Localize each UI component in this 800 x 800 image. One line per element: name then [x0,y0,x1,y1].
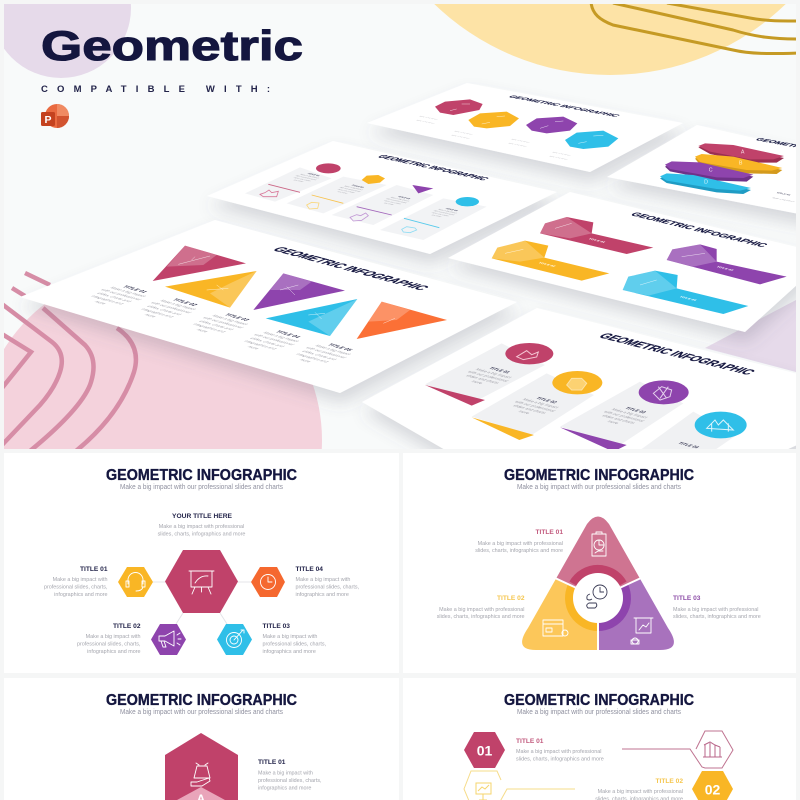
slide heading: GEOMETRIC INFOGRAPHIC [506,95,622,118]
callout: title 04: infographics and more [296,592,349,598]
top text block: YOUR TITLE HERE [172,513,233,520]
callout: title 02: professional slides, charts, [77,642,141,648]
triangle captions: with our professional [252,333,296,346]
card captions: TITLE 04 [444,208,460,212]
triangle captions: slides, charts and [247,337,286,348]
compatible with label: COMPATIBLE WITH: [41,84,270,95]
side captions [772,192,794,202]
slide mockup: stacked layers [607,125,800,220]
hexagon 02 [692,771,733,800]
callout: title 01: TITLE 01 [516,738,544,745]
outlined hexagon with board icon [464,771,575,800]
card captions: slides and charts [336,189,357,194]
card captions: slides and charts [465,374,501,385]
icon: PowerPoint logo [41,104,69,128]
gold curved lines [591,2,798,54]
decorative lilac triangle [705,300,796,372]
callout: title 01 [258,759,322,792]
card captions: with our professional [294,175,318,181]
decorative lilac circle [0,0,131,78]
card captions: with our professional [385,198,408,204]
panel subtitle: Make a big impact with our professional slides and charts [120,484,283,491]
card captions: TITLE 02 [534,397,558,404]
outlined hexagon with bar chart icon [622,731,733,768]
callout: title 01: Make a big impact with [53,577,108,583]
icon: clipboard [592,532,606,556]
card captions: TITLE 02 [350,184,366,188]
hexagon captions: Make a big impact [415,120,436,124]
decorative yellow circle [434,4,786,75]
blue hexagon with target icon [217,624,252,655]
callout: title 01: professional slides, charts, [258,778,322,784]
callout: title 02: infographics and more [87,649,140,655]
top text block: Make a big impact with professional [159,524,244,530]
triangle captions: with our professional [201,316,245,329]
card captions: slides and charts [430,212,451,217]
ribbon shapes [492,217,787,314]
callout: title 01: slides, charts, infographics and more [516,756,604,762]
pink hexagon with hand icon [165,733,238,800]
callout: title 01: infographics and more [258,786,311,792]
callout: title 01: TITLE 01 [258,759,286,766]
icon: PowerPoint logo: P [44,114,52,126]
callout: title 02: Make a big impact with professional [598,789,683,795]
triangle captions: more [245,345,261,350]
panel heading: GEOMETRIC INFOGRAPHIC [106,467,297,484]
callout: title 01: Make a big impact with professional [516,749,601,755]
icon: presentation board [631,618,653,644]
card captions: Make a big impact [474,368,514,379]
callout: title 03 [262,623,327,655]
card captions: and more [383,202,395,206]
card captions: more [517,410,532,415]
callout: title 04: Make a big impact with [296,577,350,583]
cards, badges, dividers and icons [245,163,487,240]
triangle captions: TITLE 04 [273,330,302,339]
triangle captions: Make a big impact [261,331,301,343]
callout: title 03: infographics and more [262,649,316,655]
hexagon captions: Make a big impact [418,116,439,120]
triangle captions: slides, charts and [299,350,338,361]
triangle captions: TITLE 05 [325,343,354,352]
callout: title 02: TITLE 02 [113,623,141,630]
hexagon captions: Make a big impact [551,152,572,156]
ribbon captions: TITLE 02 [537,262,556,267]
panel subtitle: Make a big impact with our professional slides and charts [517,484,681,491]
icon: clock and person [587,585,607,608]
layered bars A B C D [660,143,784,194]
callout: title 04 [296,566,360,598]
card captions: more [470,380,485,385]
callout: title 02: slides, charts, infographics and more [437,614,524,620]
hexagon captions: Make a big impact [548,156,569,160]
slide mockup: hexagon row [367,83,683,172]
layered bars A B C D: D [704,179,708,185]
triangle captions: infographics and [241,340,278,351]
triangle captions [91,285,353,362]
callout: title 02: TITLE 02 [497,595,525,602]
panel heading: GEOMETRIC INFOGRAPHIC [504,467,694,484]
callout: title 02 [595,778,683,800]
top text block: slides, charts, infographics and more [158,532,245,538]
yellow hexagon with headset icon [118,567,153,597]
ribbon captions [537,238,734,302]
card captions: Make a big impact [437,209,458,214]
hexagon captions [415,116,572,160]
card captions: and more [292,179,305,183]
card captions: TITLE 03 [396,196,412,200]
triangle captions: Make a big impact [210,314,250,326]
callout: title 01: infographics and more [54,592,108,598]
triangle captions: infographics and [88,295,125,306]
icon: browser window [543,620,568,636]
callout: title 02: TITLE 02 [656,778,683,785]
triangle captions: slides, charts and [196,320,235,331]
ribbon captions: TITLE 04 [678,296,698,302]
callout: title 01 [516,738,604,762]
callout: title 01: TITLE 01 [536,529,563,536]
card captions [287,173,460,219]
card captions: TITLE 01 [487,367,511,374]
triangle captions: Make a big impact [313,344,353,356]
triangle captions: infographics and [138,308,175,319]
triangle shapes [153,246,447,339]
panel: numbered hexagon infographic [403,678,796,800]
panel heading: GEOMETRIC INFOGRAPHIC [106,692,297,709]
card captions: with our professional [513,400,557,412]
callout: title 03: TITLE 03 [673,595,701,602]
panel: triangle infographic [403,453,796,673]
card captions: and more [430,214,443,218]
triangle captions: TITLE 01 [120,285,149,294]
decorative pink circle [4,304,322,449]
card captions: with our professional [432,210,456,216]
segmented triangle chart [522,516,674,650]
slide mockup: tall cards with circles [362,314,796,449]
slide heading: GEOMETRIC INFOGRAPHIC [595,332,758,377]
slide heading: GEOMETRIC INFOGRAPHIC [269,245,433,292]
card captions: Make a big impact [521,398,561,409]
hexagon 01: 01 [477,742,492,758]
callout: title 02 [77,623,141,655]
central hexagon with presentation icon [165,550,238,613]
card captions: more [606,420,621,425]
hexagon captions: Make a big impact [450,135,471,139]
callout: title 03: TITLE 03 [262,623,290,630]
callout: title 01 [475,529,563,554]
triangle captions: with our professional [99,288,143,301]
triangle captions: slides, charts and [94,292,133,303]
panel subtitle: Make a big impact with our professional slides and charts [120,709,283,716]
side captions: Make a big impact [771,197,796,202]
hexagon captions: Make a big impact [507,143,528,147]
hexagon captions: Make a big impact [453,131,474,135]
triangle captions: TITLE 02 [170,298,199,307]
panel heading: GEOMETRIC INFOGRAPHIC [504,692,694,709]
triangle captions: TITLE 03 [222,313,251,322]
callout: title 03: professional slides, charts, [262,642,327,648]
callout: title 02: Make a big impact with [86,634,141,640]
ribbon captions: TITLE 03 [715,266,734,271]
card captions: TITLE 04 [676,442,700,449]
layered bars A B C D: B [739,160,743,166]
hexagon captions: Make a big impact [510,139,531,143]
triangle captions: more [297,358,313,363]
ribbon captions: TITLE 01 [587,238,606,243]
triangle captions: with our professional [149,301,193,314]
panel: hero showcase [4,4,796,449]
card captions: slides and charts [383,200,403,205]
card captions: with our professional [338,187,362,192]
card captions: Make a big impact [299,174,320,179]
main title: Geometric [41,22,303,69]
triangle captions: more [92,300,108,305]
card captions: slides and charts [292,177,313,182]
card captions: TITLE 03 [623,407,647,414]
slide mockup: ribbon tags [448,192,800,332]
panel: stacked hexagon infographic [4,678,399,800]
triangle captions: infographics and [293,353,330,364]
callout: title 03: Make a big impact with professional [673,607,758,613]
triangle captions: Make a big impact [108,286,148,298]
card captions: slides and charts [601,414,637,425]
hexagon 02: 02 [705,782,720,798]
card captions: Make a big impact [343,185,364,191]
side captions: TITLE 01 [775,192,792,196]
callout: title 01: TITLE 01 [80,566,108,573]
top text block [158,513,245,538]
callout: title 02 [437,595,525,620]
card captions: with our professional [602,410,646,422]
hexagon shapes [435,99,618,149]
orange hexagon with clock icon [251,567,285,597]
card captions: and more [336,191,349,194]
pink chevron lines [2,273,136,451]
card captions: with our professional [466,370,510,382]
purple hexagon with megaphone icon [151,624,186,655]
callout: title 04: TITLE 04 [296,566,323,573]
triangle captions: with our professional [304,346,348,359]
cards and circles [425,343,747,449]
layered bars A B C D: C [709,168,713,174]
callout: title 01: slides, charts, infographics and more [475,548,563,554]
callout: title 03: Make a big impact with [262,634,317,640]
hexagon 01 [464,732,505,768]
slide heading: GEOMETRIC INFOGRAPHIC [628,211,769,249]
panel subtitle: Make a big impact with our professional slides and charts [517,709,681,716]
triangle captions: slides, charts and [144,305,183,316]
card captions: Make a big impact [610,408,650,419]
callout: title 01 [44,566,108,598]
card captions: slides and charts [512,404,548,415]
layered bars A B C D: A [741,149,745,155]
slide mockup: triangles [20,220,517,393]
slide heading: GEOMETRIC INFOGRAPHIC [375,154,492,181]
triangle captions: more [194,328,210,333]
slide mockup: cards with badges [207,141,557,254]
panel: hexagon hub infographic [4,453,399,673]
card captions: TITLE 01 [306,173,322,177]
callout: title 01: Make a big impact with [258,770,313,776]
triangle captions: infographics and [190,323,227,334]
callout: title 04: professional slides, charts, [296,584,360,590]
callout: title 03 [673,595,761,620]
connectors [153,582,251,624]
triangle captions: Make a big impact [158,299,198,311]
card captions [456,367,700,449]
triangle captions: more [142,313,158,318]
callout: title 03: slides, charts, infographics and more [673,614,761,620]
callout: title 01: professional slides, charts, [44,584,108,590]
card captions: Make a big impact [389,197,411,202]
callout: title 01: Make a big impact with professional [478,541,563,547]
callout: title 02: Make a big impact with professional [439,607,524,613]
